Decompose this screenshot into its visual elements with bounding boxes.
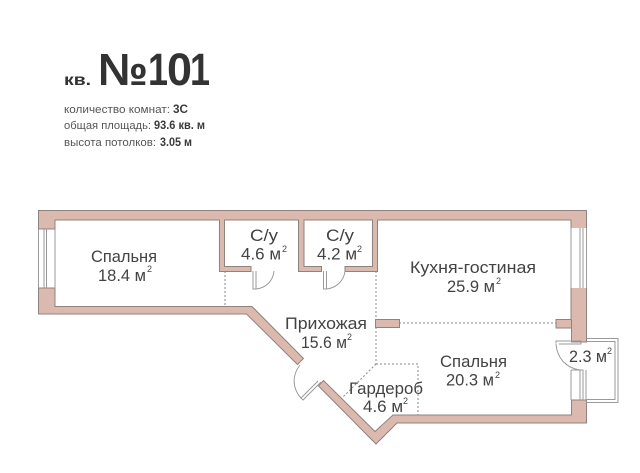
window: left bedroom	[38, 229, 55, 288]
dotted room boundaries	[225, 271, 556, 415]
title: apartment number: 1	[190, 44, 210, 95]
door: balcony	[556, 341, 581, 370]
label: bathroom 4.2	[317, 226, 362, 264]
label: bathroom 4.6: С/у	[250, 226, 279, 245]
label: hallway: 15.6 м	[301, 333, 347, 352]
label: balcony 2.3: 2	[607, 346, 612, 356]
door: bathroom 1	[253, 271, 274, 289]
label: bedroom 20.3	[440, 352, 507, 390]
label: bedroom 20.3: Спальня	[440, 352, 507, 371]
door: bathroom 2	[324, 271, 345, 289]
label: hallway: Прихожая	[285, 314, 367, 333]
label: wardrobe	[349, 379, 423, 416]
label: wardrobe: Гардероб	[349, 379, 423, 398]
label: bathroom 4.2: С/у	[326, 226, 355, 245]
label: kitchen-living room	[410, 258, 536, 296]
door: entrance	[294, 365, 321, 400]
label: bedroom 18.4: Спальня	[91, 247, 157, 266]
label: bathroom 4.2: 4.2 м	[317, 244, 357, 264]
text block: apartment specs: количество комнат:	[64, 104, 170, 116]
text block: apartment specs: 3С	[173, 104, 188, 116]
label: bedroom 18.4	[91, 247, 157, 285]
title: apartment number	[64, 44, 210, 95]
label: bathroom 4.6	[241, 226, 287, 264]
label: bedroom 18.4: 2	[147, 264, 152, 274]
label: bathroom 4.2: 2	[357, 244, 362, 254]
label: bedroom 20.3: 2	[495, 370, 500, 380]
label: bedroom 20.3: 20.3 м	[446, 370, 494, 390]
title: apartment number: №	[98, 44, 148, 95]
label: hallway: 2	[347, 332, 352, 342]
title: apartment number: 0	[167, 44, 192, 95]
wall: lower diagonal and bottom	[318, 380, 586, 444]
text block: apartment specs	[64, 104, 205, 149]
text block: apartment specs: общая площадь:	[64, 120, 151, 132]
window: kitchen	[571, 228, 587, 288]
outer and inner walls	[38, 210, 586, 364]
title: apartment number: кв.	[64, 72, 91, 89]
label: wardrobe: 2	[403, 396, 408, 406]
text block: apartment specs: 93.6 кв. м	[154, 120, 205, 132]
label: kitchen-living room: Кухня-гостиная	[410, 258, 536, 277]
label: bedroom 18.4: 18.4 м	[98, 266, 146, 285]
label: hallway	[285, 314, 367, 352]
label: bathroom 4.6: 4.6 м	[241, 244, 281, 264]
label: bathroom 4.6: 2	[282, 244, 287, 254]
label: kitchen-living room: 25.9 м	[447, 277, 495, 296]
wall stub: kitchen partition	[376, 320, 400, 328]
text block: apartment specs: 3.05 м	[160, 137, 192, 149]
floor plan	[38, 210, 618, 444]
title: apartment number: 1	[148, 44, 168, 95]
label: kitchen-living room: 2	[496, 276, 501, 286]
label: wardrobe: 4.6 м	[363, 397, 403, 416]
balcony	[571, 338, 618, 402]
text block: apartment specs: высота потолков:	[64, 137, 156, 149]
label: balcony 2.3: 2.3 м	[569, 347, 607, 366]
